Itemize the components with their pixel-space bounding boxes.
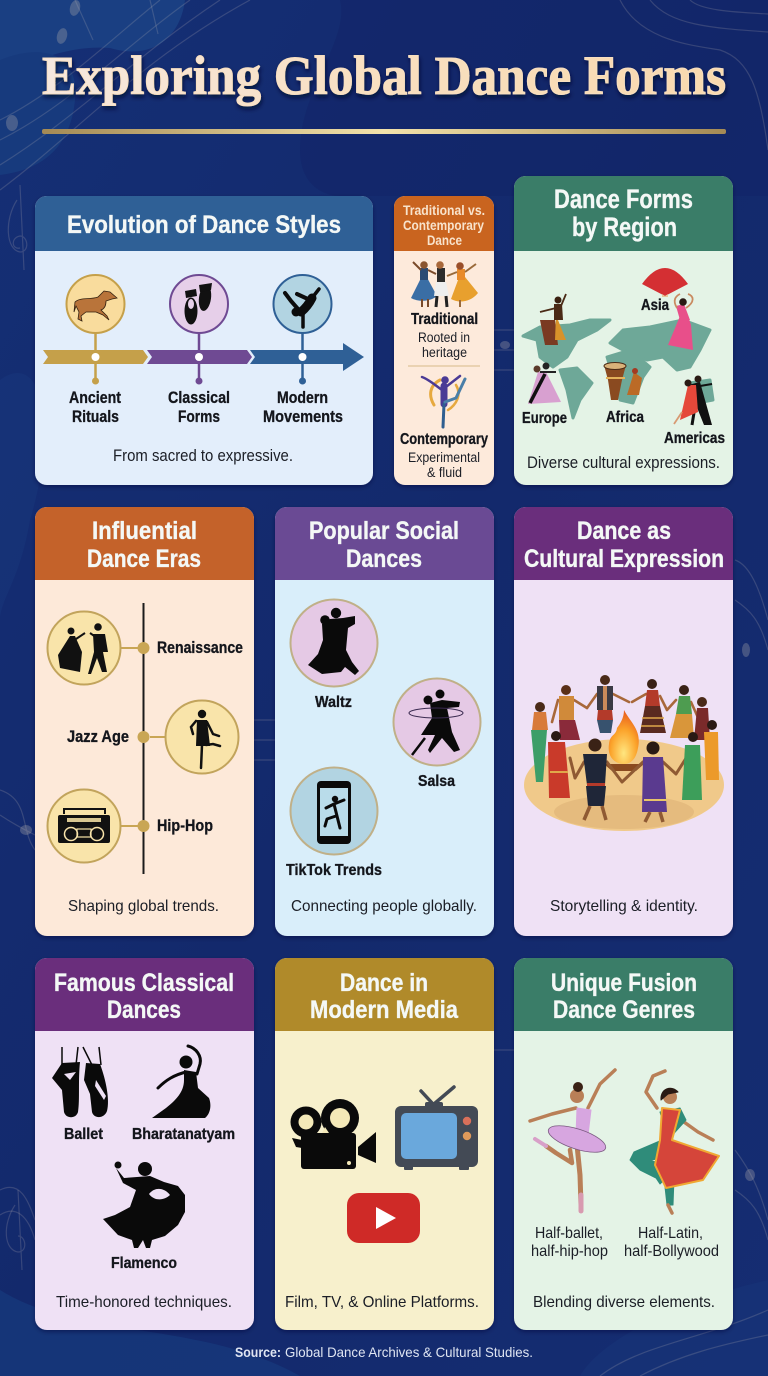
label: americas: Americas <box>664 430 725 447</box>
milestone: ancient rituals: Rituals <box>72 407 119 426</box>
icon: red fan <box>642 268 688 297</box>
label: half-latin, half-bollywood: half-Bollywood <box>624 1243 719 1260</box>
label: half-ballet, half-hip-hop: half-hip-hop <box>531 1243 608 1260</box>
milestone: classical forms: Forms <box>178 407 220 426</box>
era: hip-hop <box>48 790 213 862</box>
heading: influential dance eras <box>87 517 201 573</box>
icon: bharatanatyam: Bharatanatyam <box>132 1126 235 1143</box>
milestone: classical forms <box>168 275 230 426</box>
panel: evolution of dance styles <box>35 196 373 485</box>
description: rooted in heritage: Rooted in <box>418 330 470 345</box>
heading: dance as cultural expression <box>524 517 724 573</box>
title: Exploring Global Dance Forms <box>42 45 726 106</box>
label: traditional: Traditional <box>411 311 478 328</box>
heading: traditional vs contemporary <box>403 203 485 248</box>
illustration: ballet fusion dancer <box>530 1070 615 1211</box>
panel: dance forms by region <box>514 176 733 485</box>
title underline <box>42 129 726 134</box>
heading: influential dance eras: Influential <box>92 517 197 545</box>
heading: dance forms by region: Dance Forms <box>554 184 693 214</box>
dance: salsa <box>394 678 480 790</box>
label: half-ballet, half-hip-hop: Half-ballet, <box>535 1225 603 1242</box>
icon: contemporary dancer <box>422 376 465 427</box>
dancer: asia <box>668 294 693 350</box>
heading: dance forms by region <box>554 184 693 242</box>
heading: unique fusion dance genres <box>551 969 697 1024</box>
source line: Source: <box>235 1344 281 1360</box>
dance: tiktok trends: TikTok Trends <box>286 862 382 879</box>
description: experimental and fluid: & fluid <box>427 465 462 480</box>
panel: traditional vs contemporary <box>394 196 494 485</box>
heading: traditional vs contemporary: Dance <box>427 233 462 248</box>
caption: Storytelling & identity. <box>550 898 698 915</box>
front dancers <box>583 738 667 822</box>
heading: popular social dances <box>309 517 459 573</box>
dance: waltz: Waltz <box>315 694 352 711</box>
illustration: circle dance around bonfire <box>524 675 724 831</box>
caption: Connecting people globally. <box>291 898 477 915</box>
panel: unique fusion dance genres <box>514 958 733 1330</box>
heading: famous classical dances: Dances <box>107 996 181 1024</box>
heading: dance as cultural expression: Dance as <box>577 517 671 545</box>
icon: flamenco: Flamenco <box>111 1255 177 1272</box>
heading: famous classical dances <box>54 969 234 1024</box>
icon: ballet shoes <box>52 1047 108 1143</box>
milestone: modern movements: Modern <box>277 388 328 407</box>
world map <box>523 320 713 418</box>
caption: From sacred to expressive. <box>113 446 293 465</box>
heading: popular social dances: Popular Social <box>309 517 459 545</box>
dancer: ballroom couple <box>528 362 561 404</box>
panel: popular social dances <box>275 507 494 936</box>
heading: dance in modern media: Dance in <box>340 969 428 997</box>
icon: ballet shoes: Ballet <box>64 1126 104 1143</box>
icon: online video play button <box>347 1193 420 1243</box>
icon: traditional dancers <box>411 261 478 307</box>
dance: salsa: Salsa <box>418 773 455 790</box>
caption: Film, TV, & Online Platforms. <box>285 1294 479 1311</box>
panel: dance in modern media <box>275 958 494 1330</box>
icon: flamenco <box>103 1162 185 1272</box>
caption: Blending diverse elements. <box>533 1294 715 1311</box>
caption: Time-honored techniques. <box>56 1294 232 1311</box>
bonfire <box>604 710 644 771</box>
heading: traditional vs contemporary: Traditional vs. <box>403 203 485 218</box>
dance: tiktok trends <box>286 768 382 879</box>
era: hip-hop: Hip-Hop <box>157 817 213 835</box>
label: contemporary: Contemporary <box>400 431 488 448</box>
icon: film camera <box>290 1099 376 1169</box>
heading: evolution: Evolution of Dance Styles <box>67 211 341 239</box>
icon: television <box>395 1087 478 1170</box>
milestone: modern movements: Movements <box>263 407 343 426</box>
caption: Shaping global trends. <box>68 898 219 915</box>
era: renaissance: Renaissance <box>157 639 243 657</box>
side dancers <box>531 720 719 800</box>
dancer: tango couple <box>674 376 712 425</box>
icon: bharatanatyam <box>132 1046 235 1143</box>
era: renaissance <box>48 612 243 684</box>
heading: unique fusion dance genres: Unique Fusion <box>551 969 697 997</box>
label: asia: Asia <box>641 297 669 314</box>
description: experimental and fluid: Experimental <box>408 450 480 465</box>
description: experimental and fluid <box>408 450 480 480</box>
label: africa: Africa <box>606 409 644 426</box>
description: rooted in heritage <box>418 330 470 360</box>
heading: popular social dances: Dances <box>346 545 422 573</box>
heading: dance in modern media: Modern Media <box>310 996 459 1024</box>
description: rooted in heritage: heritage <box>422 345 467 360</box>
heading: influential dance eras: Dance Eras <box>87 545 201 573</box>
milestone: ancient rituals: Ancient <box>69 388 121 407</box>
panel: influential dance eras <box>35 507 254 936</box>
heading: traditional vs contemporary: Contemporary <box>403 218 484 233</box>
label: half-latin, half-bollywood: Half-Latin, <box>638 1225 703 1242</box>
icon: african drum <box>604 362 642 400</box>
heading: dance as cultural expression: Cultural Expression <box>524 545 724 573</box>
back row dancers <box>532 675 710 740</box>
label: europe: Europe <box>522 410 567 427</box>
label: half-ballet, half-hip-hop <box>531 1225 608 1260</box>
heading: dance in modern media <box>310 969 459 1024</box>
milestone: modern movements <box>263 275 343 426</box>
timeline arrow <box>43 343 364 371</box>
panel: famous classical dances <box>35 958 254 1330</box>
dance: waltz <box>290 600 378 711</box>
label: half-latin, half-bollywood <box>624 1225 719 1260</box>
heading: dance forms by region: by Region <box>572 212 677 242</box>
era: jazz age <box>67 700 238 774</box>
dancer: drummer <box>540 294 566 345</box>
source line: Global Dance Archives & Cultural Studies. <box>285 1344 533 1360</box>
heading: famous classical dances: Famous Classical <box>54 969 234 997</box>
illustration: bollywood fusion dancer <box>630 1071 719 1213</box>
caption: Diverse cultural expressions. <box>527 453 720 472</box>
heading: unique fusion dance genres: Dance Genres <box>553 996 695 1024</box>
era: jazz age: Jazz Age <box>67 728 129 746</box>
milestone: ancient rituals <box>66 275 124 426</box>
milestone: classical forms: Classical <box>168 388 230 407</box>
panel: dance as cultural expression <box>514 507 733 936</box>
